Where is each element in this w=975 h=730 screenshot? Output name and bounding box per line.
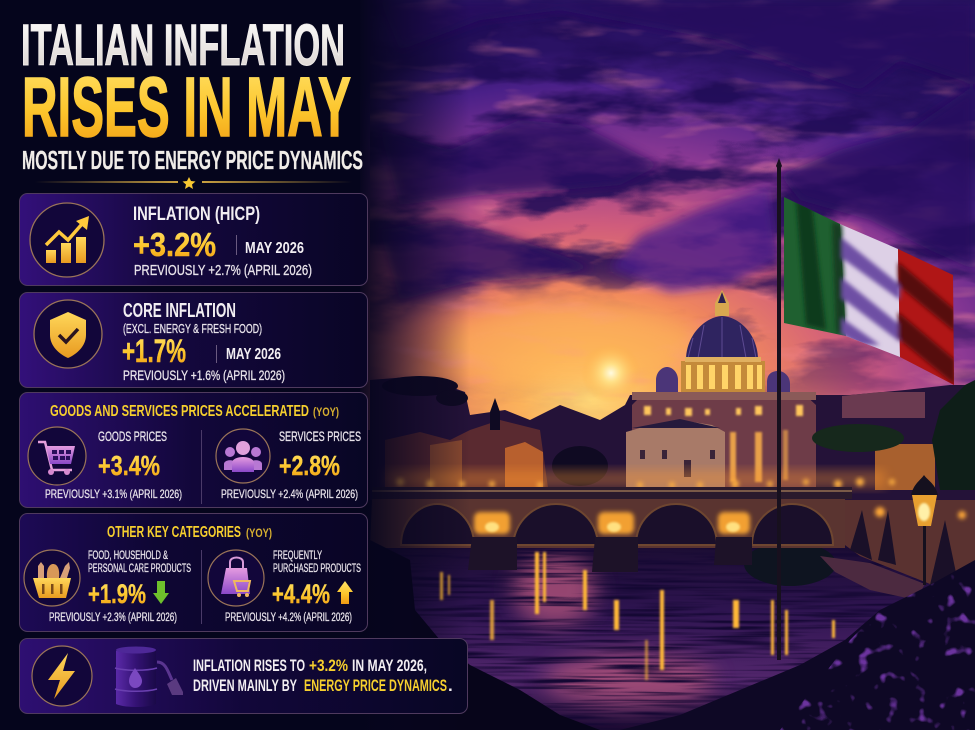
- warm horizon glow: [440, 305, 700, 385]
- callout line 1: INFLATION RISES TO: [193, 656, 305, 675]
- stone bridge: [370, 487, 852, 572]
- icon: people: [216, 429, 270, 483]
- divider: [201, 550, 202, 624]
- callout line 2: DRIVEN MAINLY BY: [193, 676, 297, 695]
- food label: [88, 548, 191, 575]
- basilica facade: [632, 392, 816, 488]
- title line 2: RISES IN MAY: [22, 60, 351, 154]
- flag green stripe: [784, 197, 846, 336]
- dark purple clouds texture: [370, 0, 975, 420]
- previous value: PREVIOUSLY +1.6% (APRIL 2026): [123, 367, 285, 383]
- period: MAY 2026: [226, 346, 281, 363]
- riverside shrubs: [744, 542, 836, 586]
- period: MAY 2026: [245, 240, 304, 257]
- right tree: [932, 380, 975, 490]
- lavender bush: [620, 550, 975, 730]
- frequent value: +4.4%: [272, 579, 330, 609]
- trees on the left: [382, 376, 608, 486]
- rotunda building: [626, 420, 725, 488]
- services label: SERVICES PRICES: [279, 429, 361, 444]
- food label: FOOD, HOUSEHOLD &: [88, 548, 168, 562]
- title line 1: ITALIAN INFLATION: [21, 13, 345, 78]
- flag white stripe: [840, 224, 900, 357]
- warm street glow: [385, 470, 885, 488]
- left dark fade: [0, 0, 470, 730]
- sub heading: (EXCL. ENERGY & FRESH FOOD): [123, 322, 262, 336]
- panel heading: OTHER KEY CATEGORIES: [107, 524, 241, 541]
- services previous: PREVIOUSLY +2.4% (APRIL 2026): [221, 487, 358, 501]
- arches: [401, 504, 833, 545]
- separator: [216, 345, 217, 363]
- icon: lightning bolt: [32, 646, 92, 706]
- umbrella pine: [812, 424, 904, 452]
- dome drum: [681, 361, 765, 393]
- panel heading: (YOY): [246, 526, 272, 540]
- separator: [236, 235, 237, 255]
- background photo: Rome at sunset: [362, 0, 975, 730]
- panel heading: GOODS AND SERVICES PRICES ACCELERATED: [50, 403, 309, 420]
- dark foliage bottom: [370, 540, 600, 730]
- icon: shopping bag with cart: [208, 550, 264, 606]
- left building tones: [385, 420, 548, 488]
- embankment buttresses: [850, 510, 960, 592]
- riverside path: [820, 556, 925, 600]
- facade lit columns: [730, 430, 788, 482]
- panel: core inflation: [20, 292, 368, 388]
- piers: [468, 537, 752, 572]
- food value: +1.9%: [88, 579, 146, 609]
- goods label: GOODS PRICES: [98, 429, 167, 444]
- flag red stripe: [898, 249, 954, 385]
- callout line 2: [193, 676, 453, 695]
- title block: [21, 13, 363, 189]
- subtitle: MOSTLY DUE TO ENERGY PRICE DYNAMICS: [22, 145, 363, 175]
- bridge pier lights: [474, 512, 750, 534]
- street lights glow: [396, 478, 895, 488]
- panel heading: (YOY): [313, 405, 339, 419]
- panel: other key categories: [20, 514, 368, 632]
- icon: oil barrel and nozzle: [115, 646, 183, 707]
- water ripples: [370, 540, 975, 730]
- distant hills and buildings: [370, 290, 975, 500]
- flag pole: [777, 166, 781, 660]
- frequent label: FREQUENTLY: [273, 548, 322, 562]
- sun: [581, 343, 641, 403]
- icon: shield: [34, 300, 102, 368]
- panel: inflation HICP: [20, 194, 368, 286]
- frequent previous: PREVIOUSLY +4.2% (APRIL 2026): [225, 612, 352, 624]
- icon: rising chart: [30, 203, 104, 277]
- services value: +2.8%: [279, 450, 340, 481]
- callout line 2: ENERGY PRICE DYNAMICS: [304, 676, 447, 695]
- icon: grocery basket: [24, 550, 80, 606]
- large cloud masses: [380, 0, 975, 300]
- river water: [370, 530, 975, 730]
- castle: [875, 444, 935, 490]
- previous value: PREVIOUSLY +2.7% (APRIL 2026): [134, 263, 312, 279]
- icon: shopping cart: [28, 427, 86, 485]
- divider: [201, 430, 202, 504]
- food previous: PREVIOUSLY +2.3% (APRIL 2026): [49, 612, 177, 624]
- value: +3.2%: [133, 226, 216, 263]
- pink water reflections: [513, 554, 715, 706]
- panel: energy callout: [20, 638, 468, 714]
- flag folds: [796, 200, 955, 385]
- callout line 1: IN MAY 2026,: [352, 656, 427, 675]
- arrow up: [337, 581, 353, 604]
- dome lantern: [715, 290, 729, 316]
- sunset sky: [360, 0, 975, 430]
- sky pink streaks: [370, 0, 975, 400]
- right embankment wall: [838, 500, 975, 602]
- goods value: +3.4%: [98, 450, 160, 481]
- callout line 1: +3.2%: [309, 656, 348, 675]
- value: +1.7%: [122, 333, 186, 369]
- pole finial: [776, 158, 782, 171]
- callout line 2: .: [448, 676, 453, 695]
- embankment lights: [875, 507, 966, 519]
- gold water reflections: [440, 552, 835, 680]
- arrow down: [153, 581, 169, 604]
- side cupolas: [656, 367, 678, 392]
- panel: goods and services: [20, 392, 368, 508]
- city silhouette: [370, 376, 975, 500]
- Italian flag and pole: [776, 158, 955, 660]
- right side buildings: [842, 392, 925, 418]
- food label: PERSONAL CARE PRODUCTS: [88, 561, 191, 575]
- dome base ring: [685, 357, 761, 362]
- heading: INFLATION (HICP): [133, 204, 260, 225]
- street lamp: [911, 475, 938, 585]
- bridge body: [370, 498, 845, 548]
- frequent label: [273, 548, 361, 575]
- heading: CORE INFLATION: [123, 300, 236, 322]
- bridge parapet: [372, 487, 852, 499]
- goods previous: PREVIOUSLY +3.1% (APRIL 2026): [45, 487, 182, 501]
- St Peter's dome: [686, 316, 758, 360]
- divider star: [35, 177, 352, 189]
- frequent label: PURCHASED PRODUCTS: [273, 561, 361, 575]
